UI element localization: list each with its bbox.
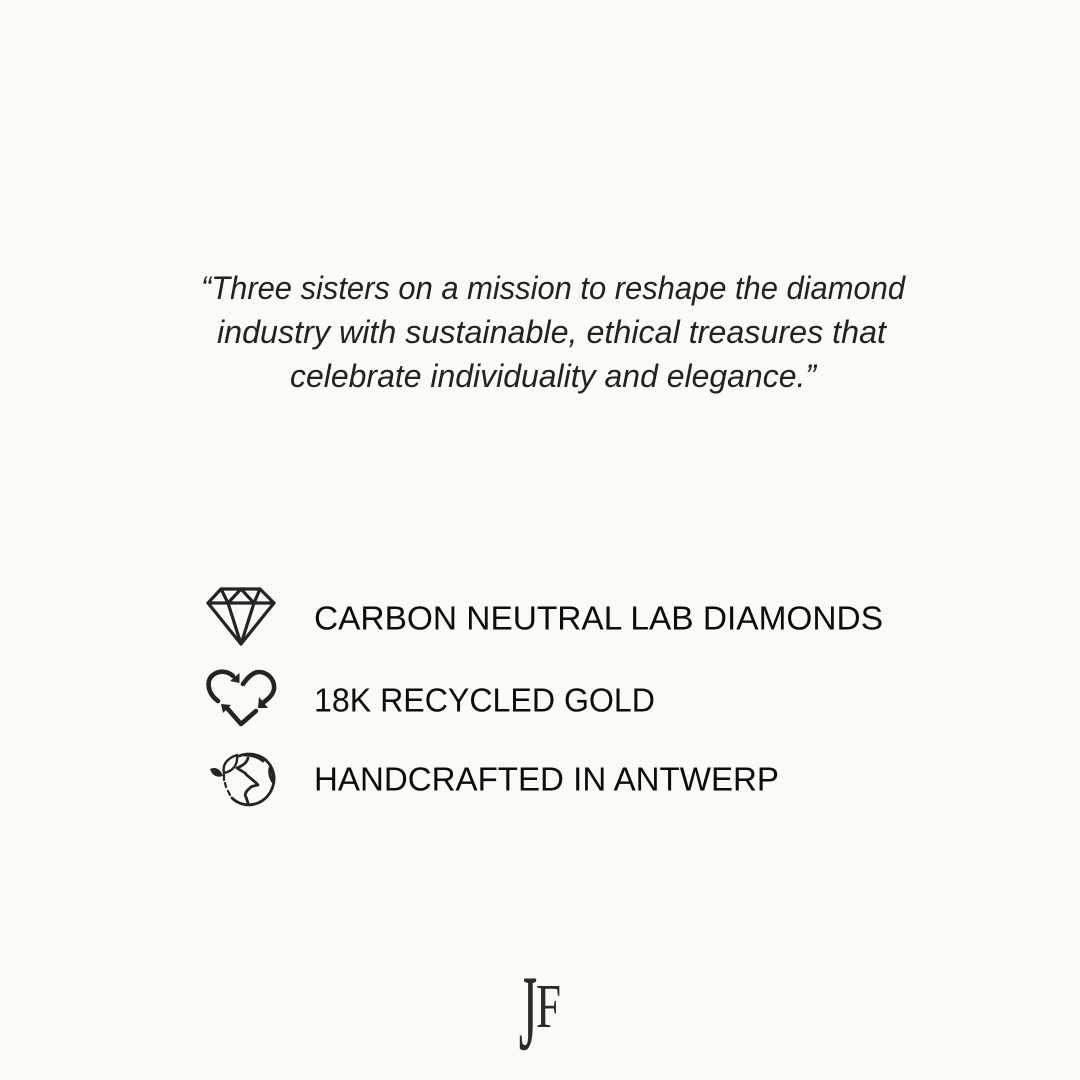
quote text block bbox=[201, 270, 906, 394]
icon: diamond bbox=[208, 589, 274, 644]
logo: JF monogram: F bbox=[536, 971, 561, 1041]
logo: JF monogram: J bbox=[519, 953, 537, 1072]
quote text block: “Three sisters on a mission to reshape the diamond bbox=[201, 270, 906, 306]
icon: earth with leaf bbox=[210, 754, 274, 805]
feature: carbon neutral lab diamonds: CARBON NEUTRAL LAB DIAMONDS bbox=[314, 600, 883, 638]
feature: handcrafted in antwerp: HANDCRAFTED IN ANTWERP bbox=[314, 762, 779, 798]
quote text block: celebrate individuality and elegance.” bbox=[290, 358, 817, 394]
icon: recycling heart bbox=[209, 672, 274, 724]
feature: 18k recycled gold: 18K RECYCLED GOLD bbox=[314, 682, 655, 720]
quote text block: industry with sustainable, ethical treasures that bbox=[217, 314, 887, 350]
logo: JF monogram bbox=[519, 953, 561, 1072]
feature list bbox=[314, 600, 883, 798]
